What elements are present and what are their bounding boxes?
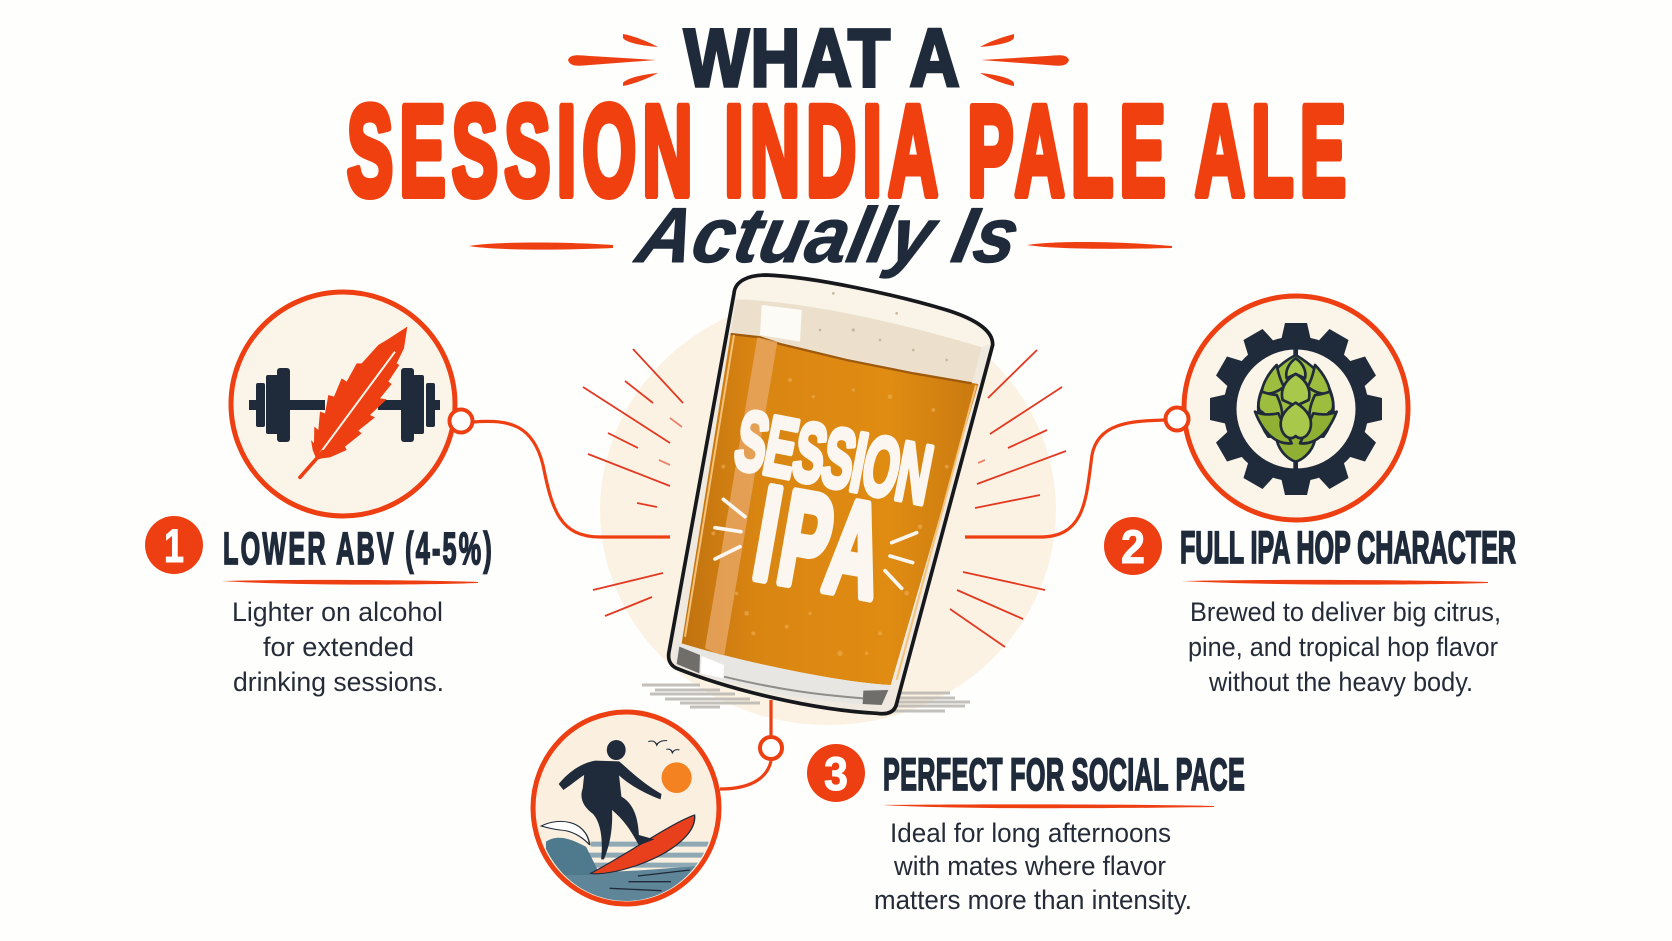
sun (662, 762, 692, 793)
body text: Brewed to deliver big citrus, (1190, 597, 1501, 627)
number badge 1 (145, 516, 203, 574)
icon circle: surfer (532, 712, 720, 913)
icon: surfer scene (540, 740, 709, 901)
icon: barbell (249, 368, 440, 442)
body text: with mates where flavor (893, 851, 1166, 881)
beer liquid (682, 334, 978, 685)
body text (1188, 597, 1501, 697)
body text: drinking sessions. (233, 667, 444, 697)
birds (648, 741, 679, 753)
wave foam (541, 821, 590, 845)
title burst right (980, 34, 1069, 86)
glass highlight strip (705, 337, 777, 657)
panel: full IPA hop character (1104, 296, 1516, 697)
underline (1182, 580, 1488, 585)
glass text: SESSION: SESSION (728, 394, 939, 523)
surfer (559, 740, 662, 859)
body text: pine, and tropical hop flavor (1188, 632, 1498, 662)
sea (560, 866, 696, 901)
glass body (669, 275, 993, 714)
surfboard (591, 815, 695, 874)
body text: Lighter on alcohol (232, 597, 443, 627)
bubbles (711, 378, 949, 656)
glass text: IPA: IPA (745, 458, 894, 626)
wave (546, 838, 600, 875)
icon circle: gear and hop (1184, 296, 1408, 520)
body text: without the heavy body. (1208, 667, 1473, 697)
heading: FULL IPA HOP CHARACTER (1180, 522, 1516, 573)
connector ring (450, 410, 472, 432)
water lines (610, 870, 690, 891)
number badge 3 (807, 744, 865, 802)
beer top dark edge (731, 334, 972, 383)
panel: perfect for social pace (532, 712, 1245, 915)
glass shadow (642, 685, 970, 711)
title burst left (568, 34, 658, 86)
number badge 3: 3 (824, 747, 848, 800)
connector: point 2 to glass (965, 420, 1165, 537)
foam head (731, 277, 990, 384)
sunburst background circle (600, 295, 1056, 725)
icon circle: feather and barbell (231, 292, 455, 516)
body text (232, 597, 444, 697)
connector: point 3 to glass (720, 700, 771, 789)
underline (222, 580, 478, 585)
glass outline (669, 275, 993, 714)
sea stripes (577, 842, 709, 868)
edge highlights (685, 335, 976, 680)
heading: PERFECT FOR SOCIAL PACE (883, 749, 1245, 800)
number badge 1: 1 (164, 519, 184, 572)
heading: LOWER ABV (4-5%) (223, 523, 492, 574)
body text: Ideal for long afternoons (890, 818, 1171, 848)
connector ring (760, 737, 782, 759)
glass text sparkles (715, 499, 917, 588)
underline (883, 804, 1214, 808)
body text (874, 818, 1192, 915)
glass base (675, 643, 891, 705)
title line: Actually Is: Actually Is (629, 192, 1027, 279)
title underline left (469, 242, 613, 250)
number badge 2: 2 (1121, 520, 1145, 573)
title line: WHAT A: WHAT A (684, 12, 960, 104)
title line: SESSION INDIA PALE ALE: SESSION INDIA PALE ALE (347, 79, 1346, 222)
panel: lower ABV (145, 292, 492, 697)
body text: matters more than intensity. (874, 885, 1192, 915)
connector: point 1 to glass (473, 421, 670, 537)
icon: hop cone (1255, 347, 1337, 471)
number badge 2 (1104, 517, 1162, 575)
icon: feather (300, 327, 407, 477)
beer glass (669, 275, 993, 714)
title underline right (1027, 242, 1172, 249)
body text: for extended (263, 632, 414, 662)
infographic canvas (145, 28, 1516, 914)
title block (347, 12, 1346, 279)
radiating lines (583, 349, 1066, 647)
icon: gear (1210, 323, 1382, 495)
connector ring (1166, 408, 1188, 430)
